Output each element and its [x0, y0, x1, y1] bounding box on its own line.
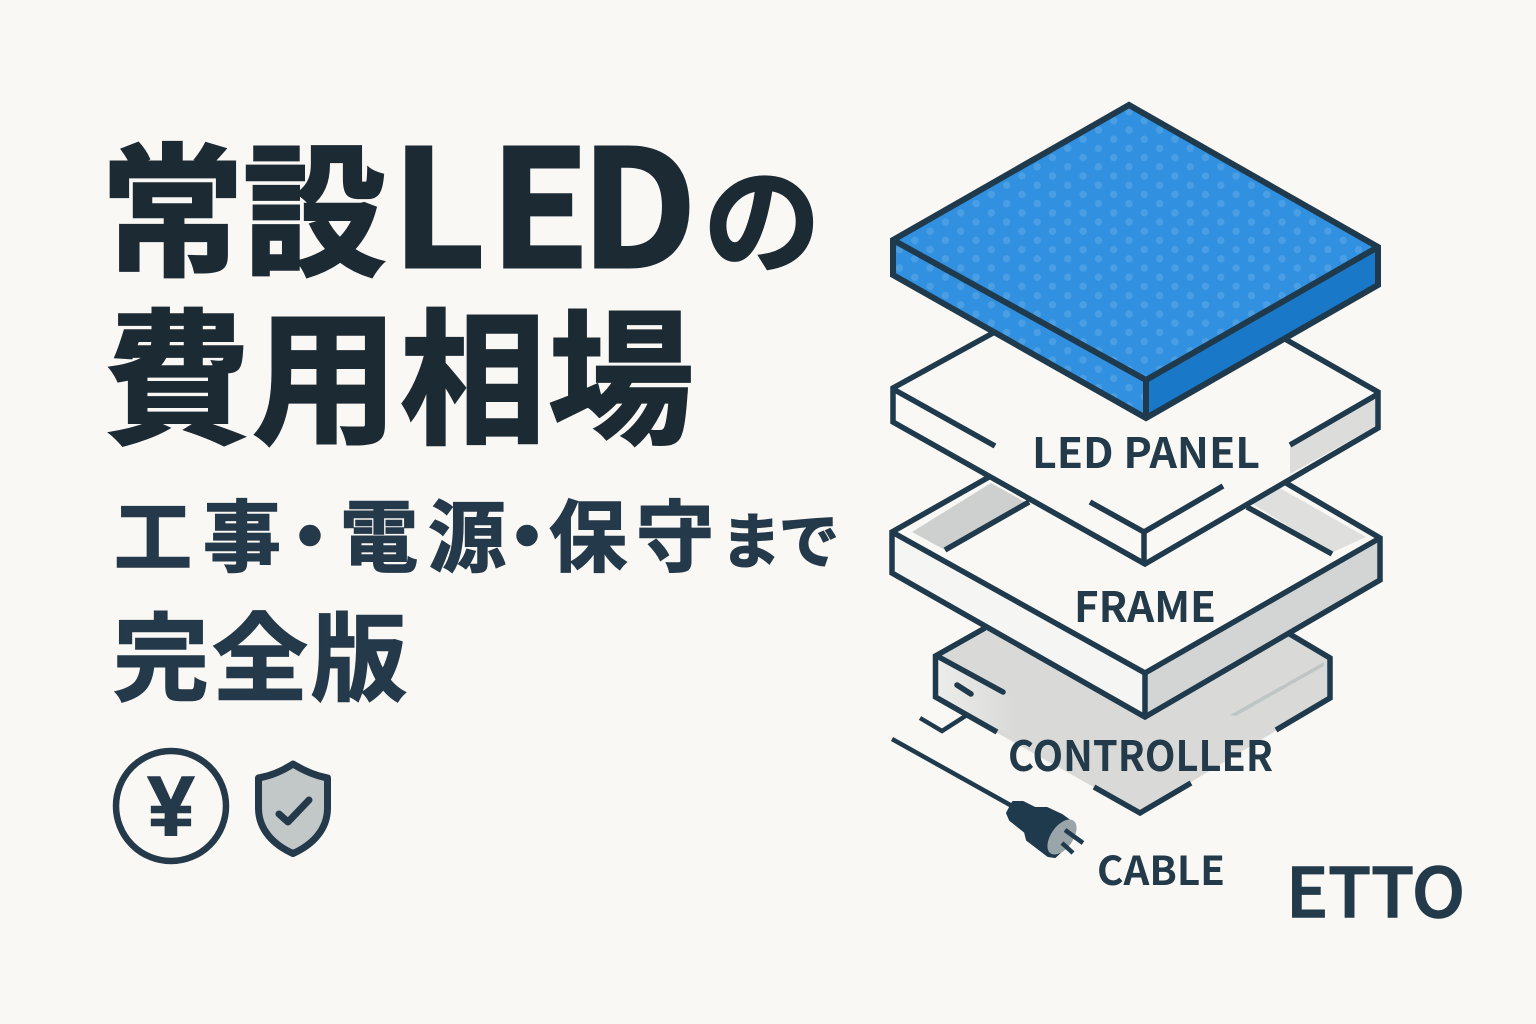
label: CABLE: CABLE [1097, 839, 1225, 897]
label: CONTROLLER: CONTROLLER [1008, 723, 1273, 784]
exploded diagram [892, 105, 1380, 897]
icon: yen coin [116, 751, 226, 861]
subtitle line 1: 工事・電源・保守 [114, 476, 714, 588]
label: FRAME: FRAME [1074, 574, 1216, 635]
title line 1: の [703, 127, 821, 298]
subtitle line 1: まで [721, 494, 839, 581]
icon: shield with check [258, 764, 328, 854]
cable stub [920, 715, 967, 731]
title line 1: 常設 [101, 99, 386, 306]
power cable and plug [892, 739, 1083, 860]
subtitle [113, 476, 839, 721]
brand logo: ETTO [1286, 838, 1465, 937]
subtitle line 2: 完全版 [113, 582, 407, 721]
layer: frame [892, 477, 1380, 717]
label: LED PANEL: LED PANEL [1032, 420, 1260, 481]
layer: controller box [920, 628, 1330, 813]
icon: yen coin: ¥ [148, 759, 195, 853]
title [101, 79, 821, 475]
title line 2: 費用相場 [104, 264, 694, 475]
layer: blue LED panel [893, 105, 1378, 418]
title line 1: LED [392, 79, 697, 314]
layer: panel tray [893, 333, 1378, 564]
